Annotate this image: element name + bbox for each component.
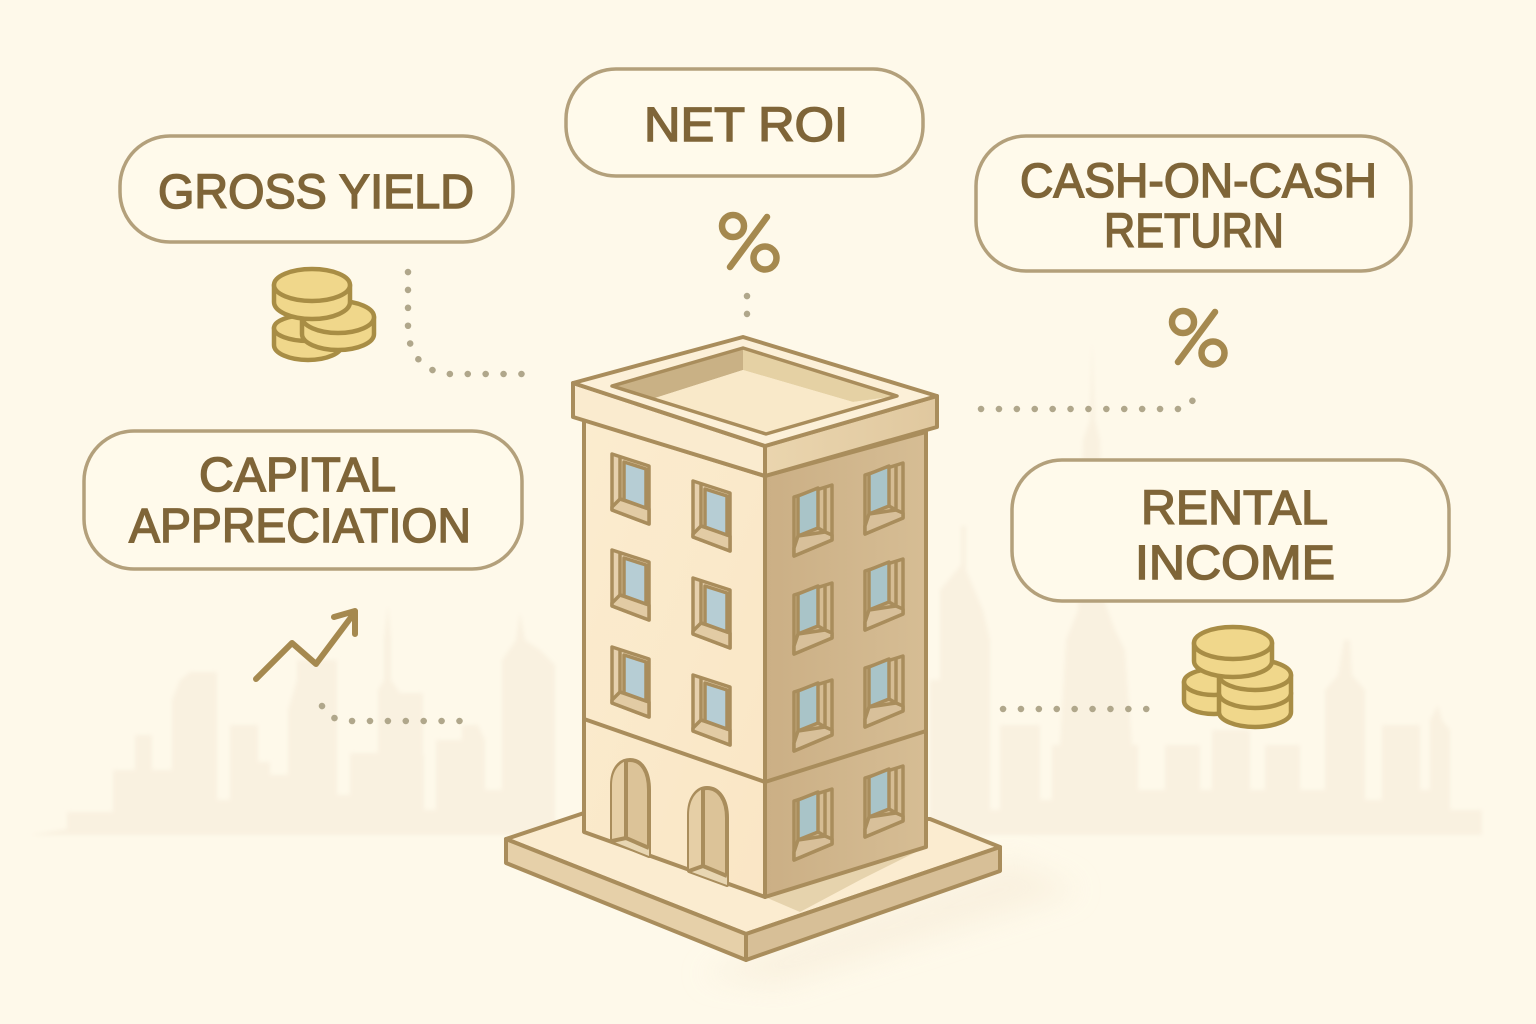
windows: left face: [612, 454, 730, 745]
pill: cash-on-cash return: [976, 136, 1411, 271]
left wall: [584, 420, 765, 897]
icon: percent net ROI: [722, 215, 776, 270]
pill: cash-on-cash return: RETURN: [1104, 205, 1284, 258]
pill: rental income: RENTAL: [1141, 482, 1328, 535]
pill: rental income: [1012, 460, 1449, 601]
background skyline: left: [30, 605, 555, 835]
pill: net ROI: NET ROI: [644, 99, 848, 152]
plinth: [506, 813, 1000, 960]
connector: rental income: [1003, 706, 1148, 712]
ground shadow: [700, 860, 1080, 985]
pill: capital appreciation: APPRECIATION: [129, 500, 471, 553]
connector: cash-on-cash: [981, 385, 1195, 409]
icon: growth arrow: [256, 611, 355, 679]
floor divider: [584, 719, 926, 782]
background skyline: right: [930, 340, 1482, 835]
pill: capital appreciation: CAPITAL: [199, 449, 396, 502]
pill: cash-on-cash return: CASH-ON-CASH: [1020, 155, 1377, 208]
icon: percent cash-on-cash: [1172, 311, 1224, 364]
pill: net ROI: [566, 69, 923, 176]
right wall: [765, 432, 926, 897]
roof cornice: [573, 337, 937, 476]
windows: right face: [794, 463, 903, 860]
door: right: [689, 788, 727, 885]
building: [506, 337, 1000, 960]
pill: rental income: INCOME: [1135, 537, 1335, 590]
pill: capital appreciation: [84, 431, 522, 569]
door: left: [612, 760, 649, 856]
connector: capital appreciation: [322, 706, 464, 721]
pill: gross yield: [120, 136, 513, 242]
pill: gross yield: GROSS YIELD: [158, 166, 474, 219]
connector: net ROI: [744, 296, 750, 318]
icon: coins rental income: [1184, 627, 1291, 727]
icon: coins gross yield: [274, 269, 374, 360]
connector: gross yield: [408, 272, 526, 374]
